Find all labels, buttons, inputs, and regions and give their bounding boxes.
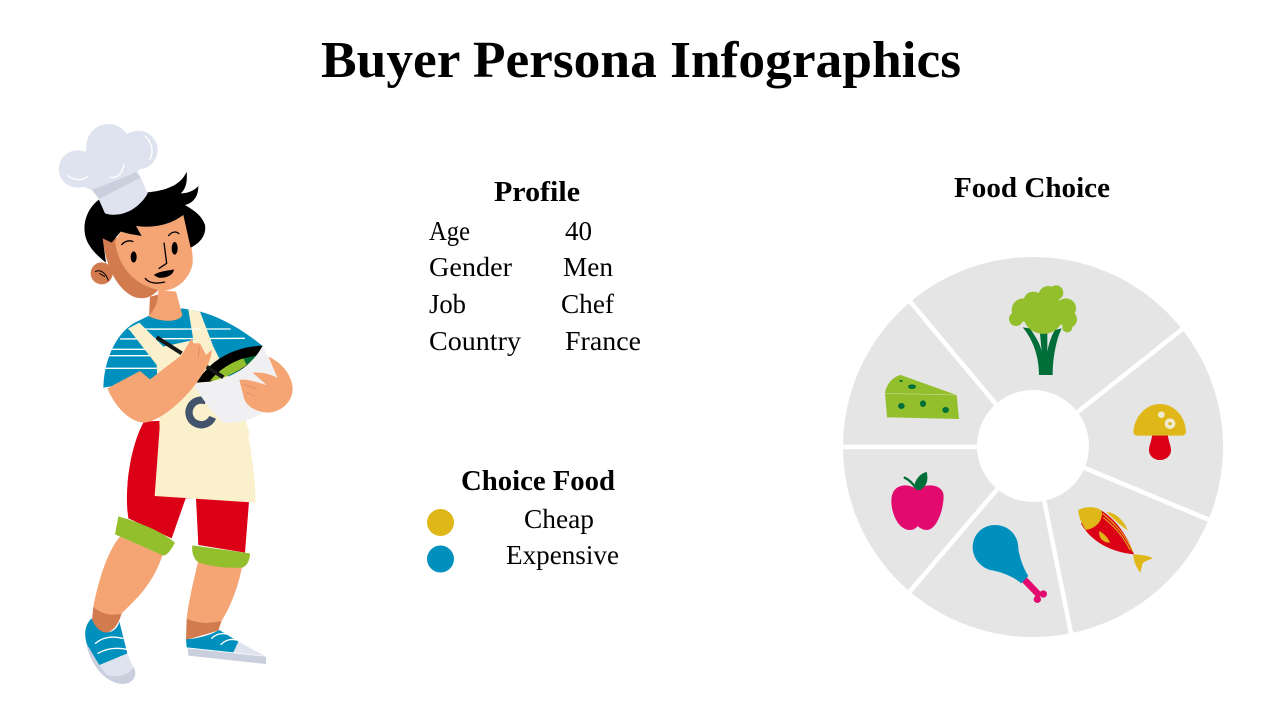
spoon handle: [157, 337, 182, 353]
legend: expensive: Expensive: [506, 540, 619, 570]
title: Buyer Persona Infographics: [321, 32, 961, 89]
icon: chicken drumstick: [973, 525, 1047, 603]
apron logo: [189, 400, 213, 425]
legend: expensive: [427, 540, 619, 572]
legend: cheap: [427, 504, 594, 536]
row: job: Chef: [561, 289, 614, 319]
shirt stripes: [105, 329, 245, 368]
row: job: Job: [429, 289, 466, 319]
arm and hand holding bowl: [239, 357, 293, 413]
row: age: [429, 216, 592, 246]
row: country: Country: [429, 326, 522, 356]
head: [59, 124, 205, 298]
legs and shoes: [85, 417, 266, 684]
chef hat: [59, 124, 158, 215]
row: country: [429, 326, 641, 356]
shirt: [103, 308, 263, 393]
facial features: [121, 232, 179, 283]
icon: cheese: [885, 375, 959, 419]
row: gender: Men: [563, 252, 613, 282]
row: gender: [429, 252, 613, 282]
panel: choice food legend: [427, 466, 619, 572]
ear: [91, 262, 113, 284]
arm and hand holding spoon: [107, 338, 212, 423]
row: job: [429, 289, 614, 319]
row: country: France: [565, 326, 641, 356]
thin stripes across strap: [150, 327, 200, 331]
apron bib and straps: [128, 309, 250, 435]
face shadow: [103, 237, 158, 298]
icon: mushroom: [1133, 404, 1186, 460]
neck: [149, 293, 163, 316]
icon: apple: [891, 472, 944, 530]
face: [115, 215, 193, 291]
apron skirt: [155, 400, 255, 503]
row: gender: Gender: [429, 252, 512, 282]
panel: profile: [429, 177, 641, 356]
wheel base: [843, 257, 1223, 637]
legend: cheap: Cheap: [524, 504, 594, 534]
torso and arms: [103, 290, 293, 435]
illustration: chef character: [59, 124, 293, 684]
row: age: Age: [429, 216, 470, 246]
row: age: 40: [565, 216, 592, 246]
heading: choice food: Choice Food: [461, 466, 615, 497]
bowl: [193, 346, 278, 423]
heading: food choice: Food Choice: [954, 173, 1110, 204]
hair: [84, 172, 205, 263]
chart: food choice wheel: [838, 257, 1223, 638]
icon: broccoli: [1009, 285, 1077, 375]
icon: fish: [1078, 507, 1153, 573]
heading: profile: Profile: [494, 177, 580, 208]
